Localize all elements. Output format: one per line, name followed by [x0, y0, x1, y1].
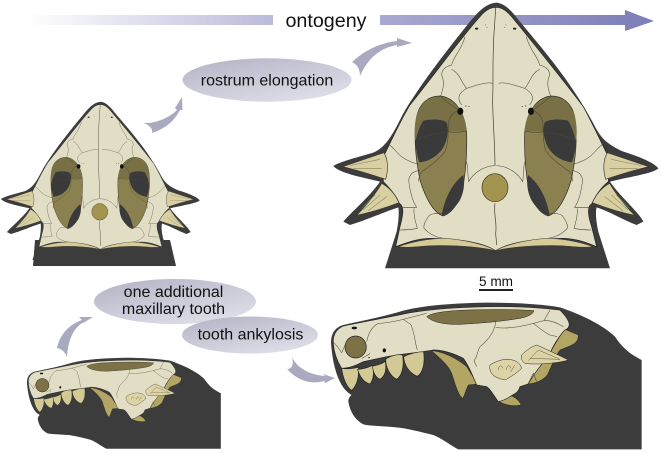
- arrow: small dorsal to rostrum elongation: [143, 97, 182, 133]
- arrow: rostrum elongation to large dorsal: [352, 38, 412, 76]
- callout: tooth ankylosis: tooth ankylosis: [198, 326, 303, 344]
- callout: one additional maxillary tooth: [94, 279, 256, 324]
- large skull, dorsal view: [333, 3, 658, 268]
- ontogeny arrow: [27, 10, 654, 31]
- scale bar: 5 mm: 5 mm: [479, 274, 513, 289]
- callout: rostrum elongation: [182, 58, 352, 102]
- arrow: tooth ankylosis to large lateral: [287, 357, 335, 383]
- callout: rostrum elongation: rostrum elongation: [201, 72, 333, 90]
- callout: one additional maxillary tooth: one additional: [124, 284, 223, 301]
- heading: ontogeny: ontogeny: [285, 10, 367, 32]
- arrow: small lateral to maxillary tooth callout: [57, 317, 93, 357]
- callout: one additional maxillary tooth: maxillary tooth: [122, 301, 225, 318]
- large skull, lateral view: [331, 303, 642, 449]
- small skull, dorsal view: [1, 102, 200, 266]
- callout: tooth ankylosis: [182, 316, 318, 354]
- small skull, lateral view: [27, 358, 221, 449]
